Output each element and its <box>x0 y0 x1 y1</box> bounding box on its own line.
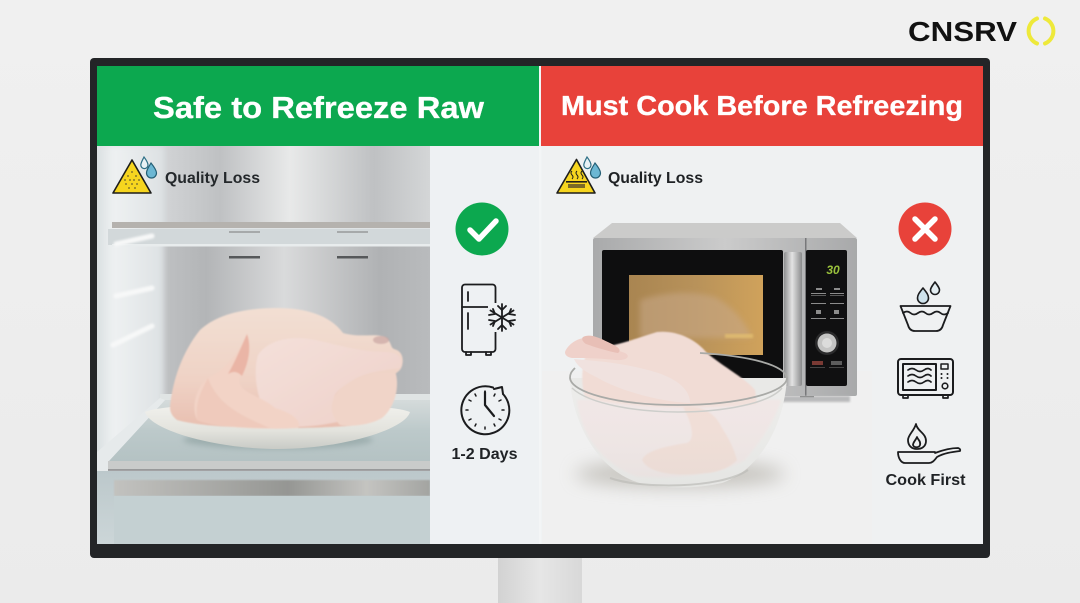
quality loss badge <box>557 157 703 193</box>
plate <box>145 403 410 449</box>
icon: microwave <box>898 359 953 398</box>
quality loss label: Quality Loss <box>165 170 260 187</box>
quality loss badge <box>113 157 260 193</box>
logo wordmark: CNSRV <box>908 16 1017 47</box>
icon: red cross <box>898 202 952 256</box>
monitor bezel <box>90 58 990 558</box>
icon: frying pan with flame <box>898 424 960 463</box>
icon: bowl of water with droplets <box>900 282 950 331</box>
logo: CNSRV <box>908 16 1053 47</box>
fridge photo <box>92 146 430 544</box>
left sidebar <box>430 146 539 544</box>
left header band <box>97 66 539 146</box>
icon: green check <box>456 202 508 256</box>
right heading: Must Cook Before Refreezing <box>561 90 963 121</box>
kitchen photo <box>565 223 857 498</box>
bowl shadow <box>575 461 785 487</box>
panel: must cook before refreezing <box>541 66 983 544</box>
center divider <box>539 66 542 544</box>
logo ring <box>1029 18 1053 44</box>
1-2 days label: 1-2 Days <box>452 446 518 463</box>
quality loss label: Quality Loss <box>608 170 703 187</box>
cook first label: Cook First <box>886 472 966 489</box>
raw chicken on plate <box>170 308 403 429</box>
chicken in glass bowl <box>565 332 787 488</box>
right header band <box>541 66 983 146</box>
icon: fridge with snowflake <box>462 284 516 355</box>
icon: clock with arrow <box>461 386 509 434</box>
microwave <box>593 223 857 402</box>
left heading: Safe to Refreeze Raw <box>153 90 485 125</box>
monitor stand <box>498 556 582 603</box>
icon: warning triangle with droplets <box>113 157 156 193</box>
panel: safe to refreeze raw <box>92 66 539 544</box>
screen <box>97 66 983 544</box>
icon: heat warning triangle with droplets <box>557 157 600 193</box>
microwave display: 30 <box>826 263 840 277</box>
